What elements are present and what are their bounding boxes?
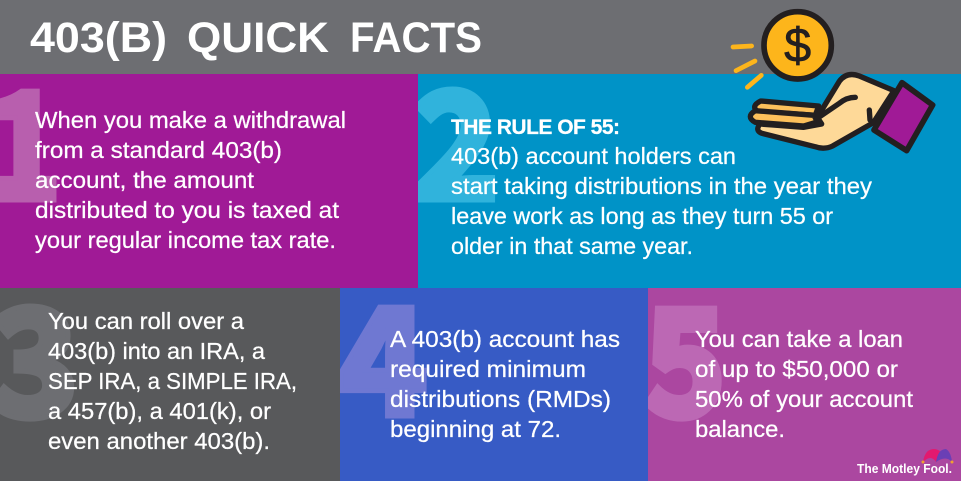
title: FACTS xyxy=(350,14,482,62)
fact 4 text: distributions (RMDs) xyxy=(390,386,611,412)
icon: hand receiving coin xyxy=(733,12,933,151)
panel: fact 2 xyxy=(418,74,961,288)
title: QUICK xyxy=(187,14,329,62)
fact 5 text: You can take a loan xyxy=(695,326,903,352)
fact 4 text: beginning at 72. xyxy=(390,416,561,442)
title: 403(B) xyxy=(30,14,167,62)
fact 3 text xyxy=(48,308,297,454)
title banner xyxy=(0,0,961,74)
fact 1 text: distributed to you is taxed at xyxy=(35,197,340,223)
icon: dollar coin: $ xyxy=(784,18,811,72)
fact 2 text: start taking distributions in the year they xyxy=(451,173,873,199)
fact 5 text xyxy=(695,326,914,442)
fact 1 text: from a standard 403(b) xyxy=(35,137,282,163)
fact 2 text: 403(b) account holders can xyxy=(451,143,736,169)
panel: fact 1 xyxy=(0,74,418,288)
fact 3 text: You can roll over a xyxy=(48,308,244,334)
icon: jester hat xyxy=(922,449,954,464)
panel: fact 4 xyxy=(340,288,648,481)
fact 4 text: A 403(b) account has xyxy=(390,326,620,352)
logo: The Motley Fool: The Motley Fool. xyxy=(857,461,952,476)
icon: dollar coin xyxy=(764,12,831,79)
fact 2 text xyxy=(451,116,873,259)
icon: wrist crease xyxy=(861,110,878,120)
fact 5 text: 50% of your account xyxy=(695,386,914,412)
fact 3 text: a 457(b), a 401(k), or xyxy=(48,398,271,424)
fact 1 text: When you make a withdrawal xyxy=(35,107,346,133)
icon: upper finger xyxy=(755,101,819,115)
fact 5 text: of up to $50,000 or xyxy=(695,356,898,382)
icon: coin rays xyxy=(733,46,761,87)
icon: cuff xyxy=(874,83,933,151)
icon: middle finger xyxy=(750,111,817,126)
numeral 5: 5 xyxy=(643,244,727,461)
fact 4 text: required minimum xyxy=(390,356,586,382)
fact 1 text: account, the amount xyxy=(35,167,255,193)
numeral 4: 4 xyxy=(338,243,428,460)
icon: thumb crease xyxy=(817,97,855,118)
fact 3 text: even another 403(b). xyxy=(48,428,270,454)
logo: The Motley Fool xyxy=(857,449,954,476)
numeral 2: 2 xyxy=(412,27,500,244)
fact 3 text: SEP IRA, a SIMPLE IRA, xyxy=(48,368,297,394)
title xyxy=(30,14,482,62)
panel: fact 3 xyxy=(0,304,296,454)
icon: palm and thumb xyxy=(758,75,894,148)
fact 1 text xyxy=(35,107,346,253)
fact 1 text: your regular income tax rate. xyxy=(35,227,336,253)
panel: fact 5 xyxy=(648,288,961,481)
fact 5 text: balance. xyxy=(695,416,785,442)
icon: hand xyxy=(750,75,894,148)
fact 3 text: 403(b) into an IRA, a xyxy=(48,338,265,364)
fact 2 text: leave work as long as they turn 55 or xyxy=(451,203,833,229)
fact 2 text: THE RULE OF 55: xyxy=(451,116,620,139)
fact 4 text xyxy=(390,326,620,442)
fact 2 text: older in that same year. xyxy=(451,233,693,259)
